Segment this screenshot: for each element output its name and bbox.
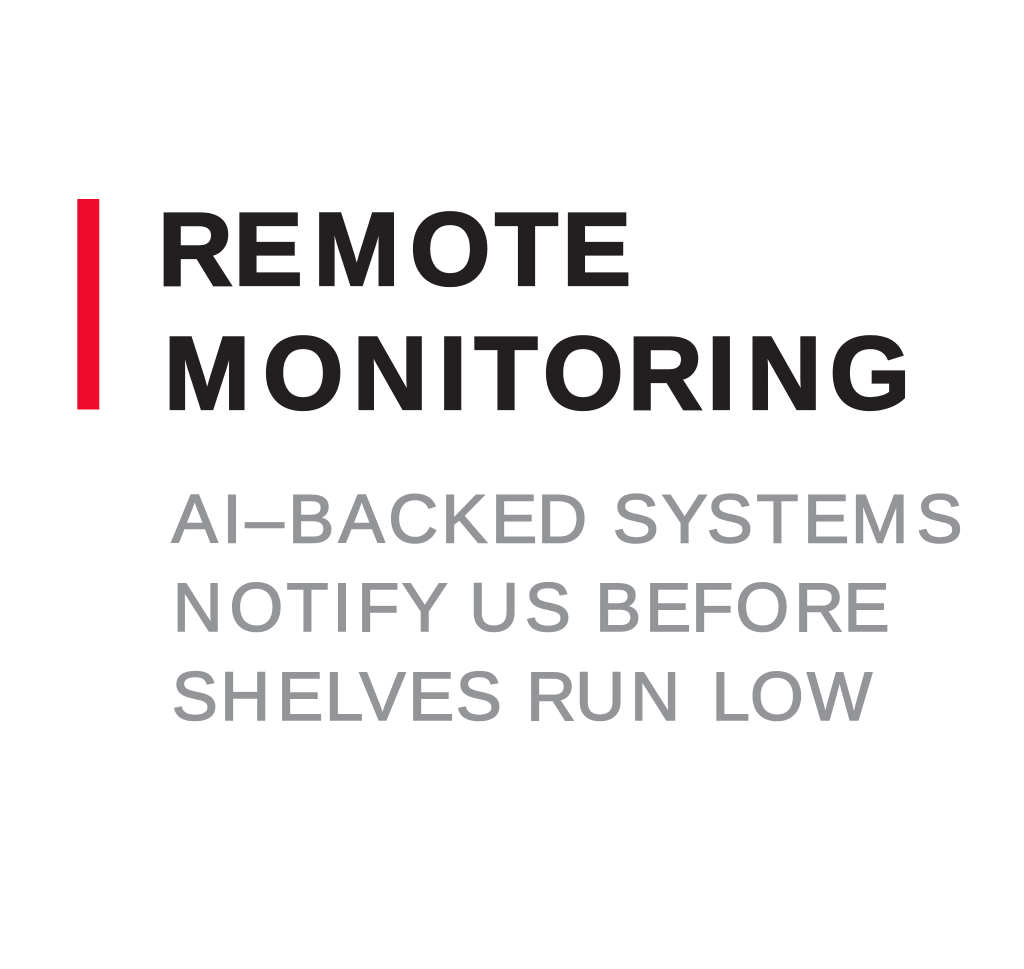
subtitle text block: SHELVES RUN LOW <box>172 658 872 735</box>
red accent bar <box>77 199 99 410</box>
title: MONITORING <box>164 316 910 432</box>
title <box>158 192 910 432</box>
subtitle text block: NOTIFY US BEFORE <box>173 569 890 646</box>
subtitle text block <box>172 481 963 735</box>
title: REMOTE <box>158 192 631 308</box>
subtitle text block: AI–BACKED SYSTEMS <box>172 481 963 558</box>
